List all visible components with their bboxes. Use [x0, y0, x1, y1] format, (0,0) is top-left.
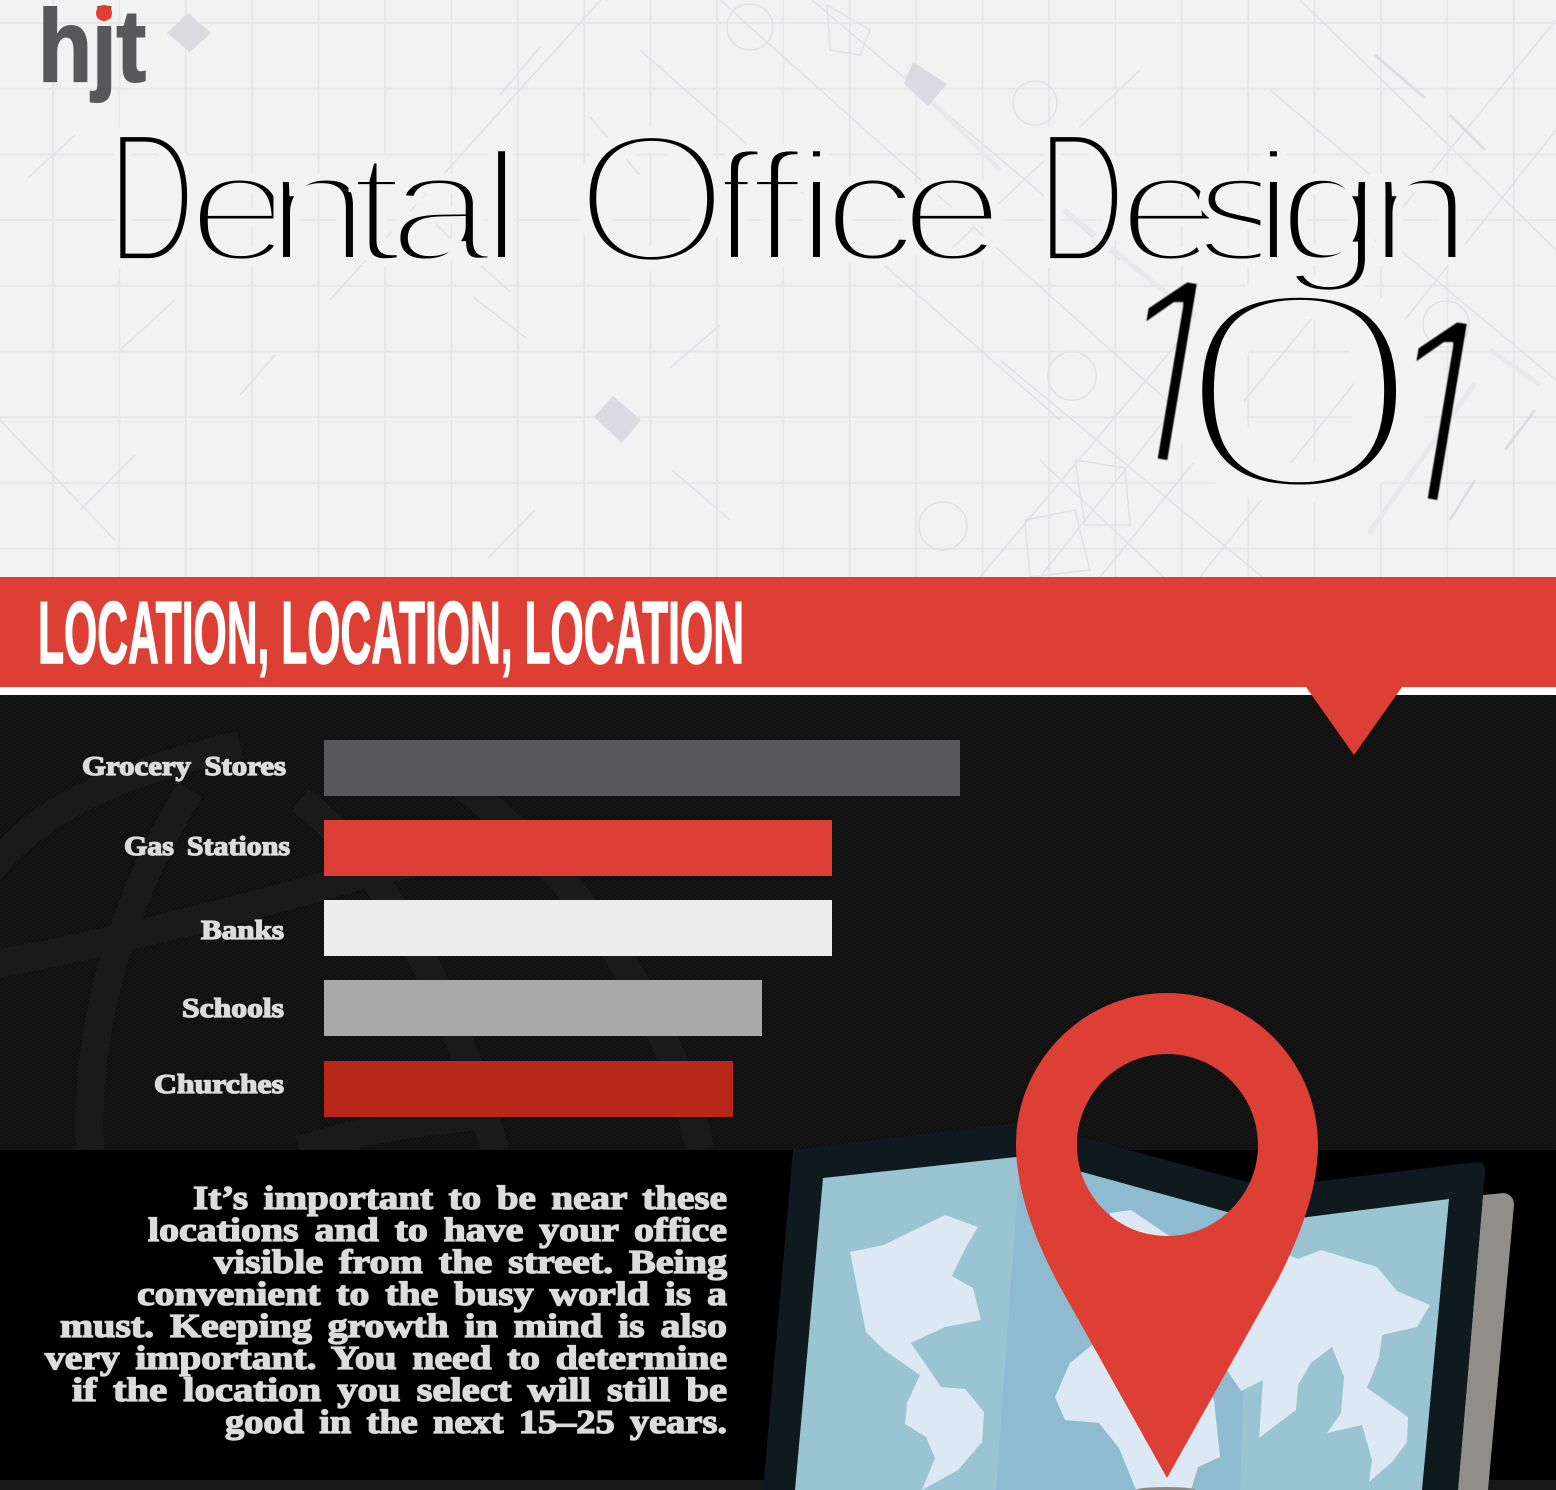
- bar: gas stations: Gas Stations: [124, 831, 290, 861]
- bar: banks: [201, 900, 832, 956]
- text block: location advice: must. Keeping growth in mind is also: [60, 1308, 727, 1345]
- title: 101: [1146, 282, 1468, 502]
- title: Dental Office Design: ffice: [710, 119, 1004, 294]
- text block: location advice: It’s important to be near these: [193, 1180, 727, 1217]
- text block: location advice: very important. You need to determine: [45, 1340, 727, 1377]
- text block: location advice: visible from the street. Being: [214, 1244, 727, 1281]
- panel: dark chart background: [0, 695, 1556, 1150]
- bar: schools: [182, 980, 762, 1036]
- bar chart: [82, 740, 960, 1117]
- bar: churches: [154, 1061, 733, 1117]
- title: 101: 1: [1084, 207, 1259, 556]
- panel: blueprint header background: [0, 0, 1556, 820]
- title: Dental Office Design: O: [574, 94, 730, 304]
- title: Dental Office Design: D: [107, 91, 196, 303]
- bar: schools: Schools: [182, 993, 284, 1023]
- text block: location advice: good in the next 15–25 years.: [225, 1404, 727, 1441]
- icon: banner pointer triangle: [1306, 687, 1402, 755]
- panel: red section banner: LOCATION, LOCATION, LOCATION: [38, 583, 744, 682]
- text block: location advice: [45, 1180, 727, 1441]
- bar: grocery stores: [82, 740, 960, 796]
- bar: churches: Churches: [154, 1069, 284, 1099]
- bar: banks: Banks: [201, 915, 284, 945]
- title: Dental Office Design: [107, 91, 1472, 304]
- text block: location advice: locations and to have your office: [148, 1212, 727, 1249]
- icon: map location pin: [1016, 993, 1318, 1478]
- title: Dental Office Design: ental: [187, 119, 522, 294]
- icon: folded world map: [763, 1123, 1514, 1490]
- title: Dental Office Design: esign: [1118, 119, 1472, 294]
- title: Dental Office Design: D: [1037, 91, 1126, 303]
- text block: location advice: if the location you select will still be: [72, 1372, 727, 1409]
- panel: black text band: [0, 1150, 1556, 1490]
- title: 101: 0: [1169, 230, 1429, 553]
- bar: gas stations: [124, 820, 832, 876]
- bar: grocery stores: Grocery Stores: [82, 751, 286, 781]
- title: 101: 1: [1354, 247, 1529, 596]
- text block: location advice: convenient to the busy world is a: [137, 1276, 727, 1313]
